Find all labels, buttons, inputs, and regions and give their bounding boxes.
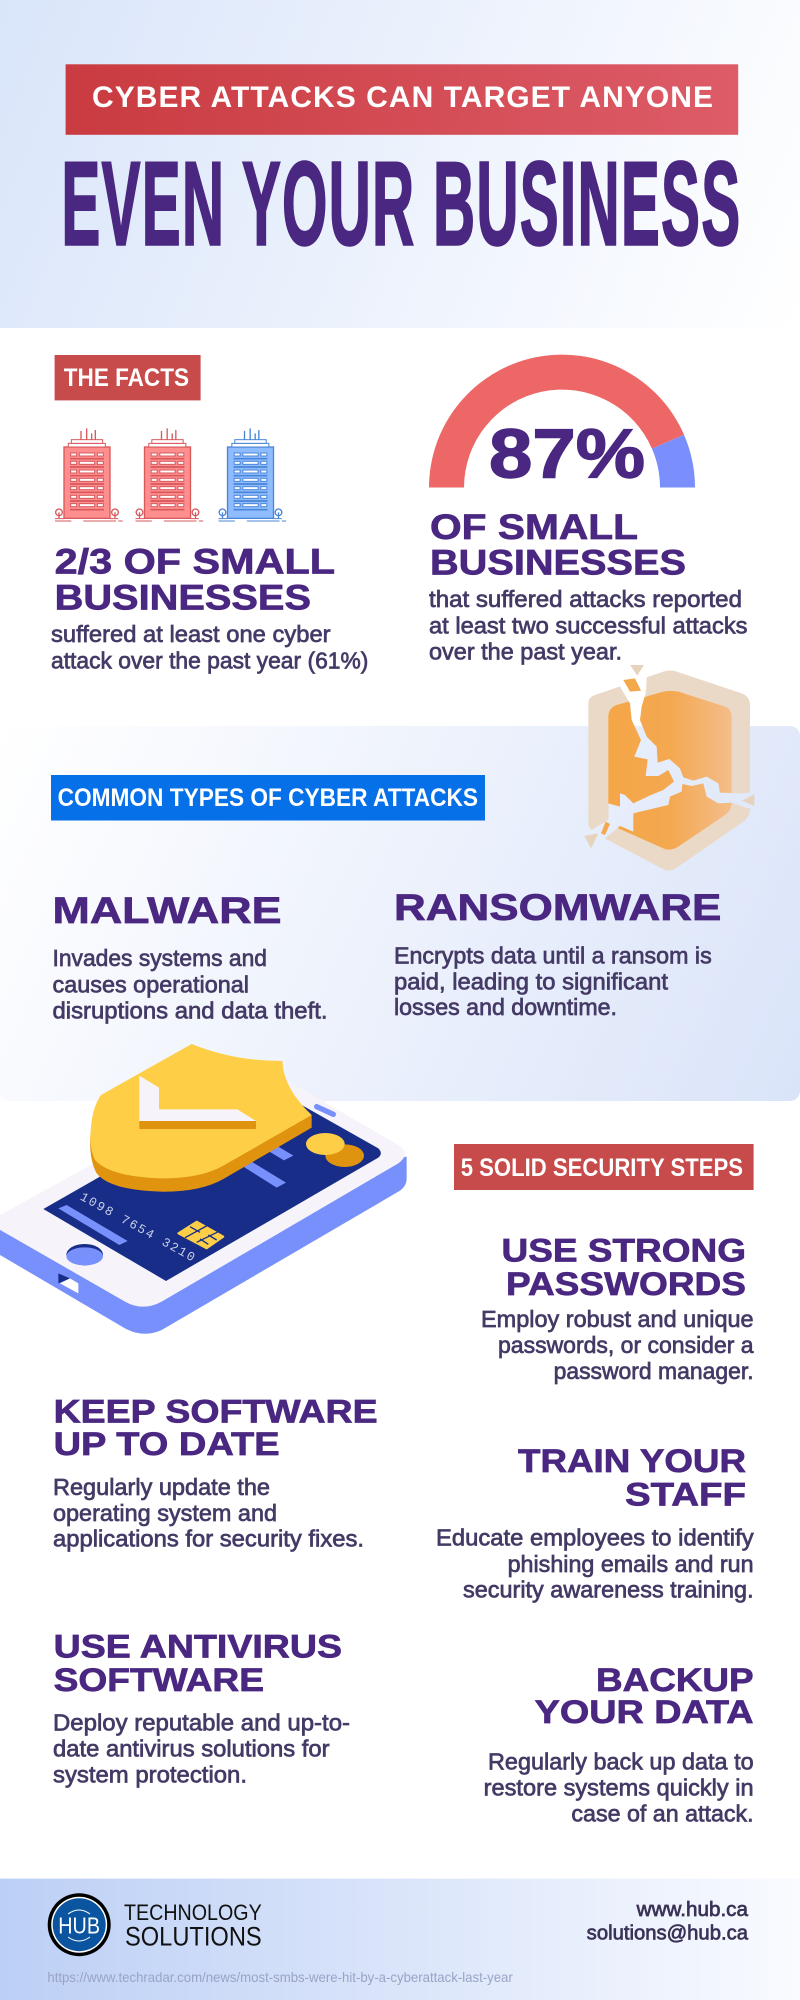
step: backup your data	[484, 1662, 754, 1826]
step: use strong passwords: USE STRONG	[502, 1233, 746, 1269]
two thirds stat text: suffered at least one cyber	[51, 621, 331, 647]
step: train your staff: phishing emails and run	[508, 1551, 754, 1577]
common types tag: COMMON TYPES OF CYBER ATTACKS	[58, 784, 478, 812]
the facts tag: THE FACTS	[64, 364, 189, 392]
step: keep software up to date	[53, 1394, 378, 1552]
gauge chart: 87 percent: 87%	[489, 415, 645, 493]
step: keep software up to date: KEEP SOFTWARE	[54, 1394, 378, 1430]
panel: security steps	[53, 1144, 754, 1826]
gauge chart: 87 percent	[429, 355, 695, 493]
logo	[48, 1893, 111, 1956]
ransomware text: paid, leading to significant	[394, 968, 669, 994]
step: train your staff: security awareness training.	[463, 1576, 754, 1602]
87 percent stat text: over the past year.	[429, 638, 622, 664]
step: backup your data: YOUR DATA	[535, 1694, 754, 1730]
logo wordmark: TECHNOLOGY	[124, 1900, 262, 1925]
icon: three office buildings	[55, 428, 286, 521]
common types tag	[51, 775, 485, 820]
logo: HUB	[58, 1912, 100, 1938]
ransomware text	[394, 942, 712, 1020]
malware heading: MALWARE	[52, 890, 282, 931]
contact details: www.hub.ca	[636, 1899, 749, 1921]
step: keep software up to date: operating system and	[53, 1500, 277, 1526]
icon: cracked shield	[584, 665, 754, 870]
footer	[0, 1879, 800, 2000]
87 percent stat text: at least two successful attacks	[429, 612, 748, 638]
subtitle banner: CYBER ATTACKS CAN TARGET ANYONE	[92, 81, 713, 114]
malware text: Invades systems and	[52, 945, 267, 971]
ransomware text: Encrypts data until a ransom is	[394, 942, 712, 968]
step: keep software up to date: UP TO DATE	[54, 1426, 280, 1462]
87 percent stat text	[429, 586, 748, 664]
panel: the facts	[51, 355, 748, 673]
step: use antivirus software: system protection.	[53, 1761, 247, 1787]
logo wordmark: SOLUTIONS	[125, 1922, 262, 1952]
ransomware text: losses and downtime.	[394, 994, 617, 1020]
malware text: disruptions and data theft.	[52, 997, 328, 1023]
step: use strong passwords: password manager.	[554, 1358, 754, 1384]
security steps tag: 5 SOLID SECURITY STEPS	[461, 1154, 743, 1182]
step: keep software up to date: applications for security fixes.	[53, 1526, 364, 1552]
step: backup your data: restore systems quickly in	[484, 1775, 754, 1801]
source url: https://www.techradar.com/news/most-smbs-were-hit-by-a-cyberattack-last-year	[47, 1969, 513, 1985]
security steps tag	[454, 1144, 754, 1190]
87 percent stat heading	[430, 508, 686, 582]
step: backup your data: case of an attack.	[571, 1800, 754, 1826]
step: use antivirus software: Deploy reputable and up-to-	[53, 1710, 350, 1736]
step: keep software up to date: Regularly update the	[53, 1474, 270, 1500]
step: use strong passwords: Employ robust and unique	[481, 1306, 754, 1332]
step: backup your data: Regularly back up data to	[488, 1749, 754, 1775]
step: train your staff	[436, 1443, 754, 1602]
step: use antivirus software	[53, 1629, 350, 1787]
two thirds stat heading: BUSINESSES	[55, 578, 311, 617]
step: use antivirus software: date antivirus solutions for	[53, 1735, 330, 1761]
logo wordmark	[124, 1900, 262, 1952]
step: use strong passwords	[481, 1233, 754, 1384]
87 percent stat text: that suffered attacks reported	[429, 586, 742, 612]
step: use antivirus software: SOFTWARE	[54, 1662, 264, 1698]
header panel	[0, 0, 800, 328]
icon: phone with card and shield: 1098 7654 3210	[77, 1189, 197, 1265]
two thirds stat text: attack over the past year (61%)	[51, 647, 368, 673]
two thirds stat heading	[55, 543, 335, 617]
87 percent stat heading: BUSINESSES	[430, 544, 686, 582]
ransomware heading: RANSOMWARE	[394, 887, 721, 928]
subtitle banner	[66, 64, 738, 135]
step: train your staff: Educate employees to identify	[436, 1525, 754, 1551]
step: use antivirus software: USE ANTIVIRUS	[54, 1629, 342, 1665]
step: backup your data: BACKUP	[596, 1662, 754, 1698]
contact details	[587, 1899, 749, 1945]
malware text	[52, 945, 328, 1023]
step: use strong passwords: PASSWORDS	[506, 1266, 746, 1302]
contact details: solutions@hub.ca	[587, 1923, 749, 1945]
step: train your staff: STAFF	[625, 1476, 746, 1512]
malware text: causes operational	[52, 971, 249, 997]
two thirds stat text	[51, 621, 368, 673]
panel: common types of cyber attacks	[0, 726, 800, 1101]
the facts tag	[55, 355, 201, 400]
step: use strong passwords: passwords, or consider a	[498, 1332, 754, 1358]
87 percent stat heading: OF SMALL	[430, 508, 638, 547]
icon: phone with card and shield	[0, 1044, 407, 1334]
step: train your staff: TRAIN YOUR	[518, 1443, 746, 1479]
two thirds stat heading: 2/3 OF SMALL	[55, 543, 335, 582]
